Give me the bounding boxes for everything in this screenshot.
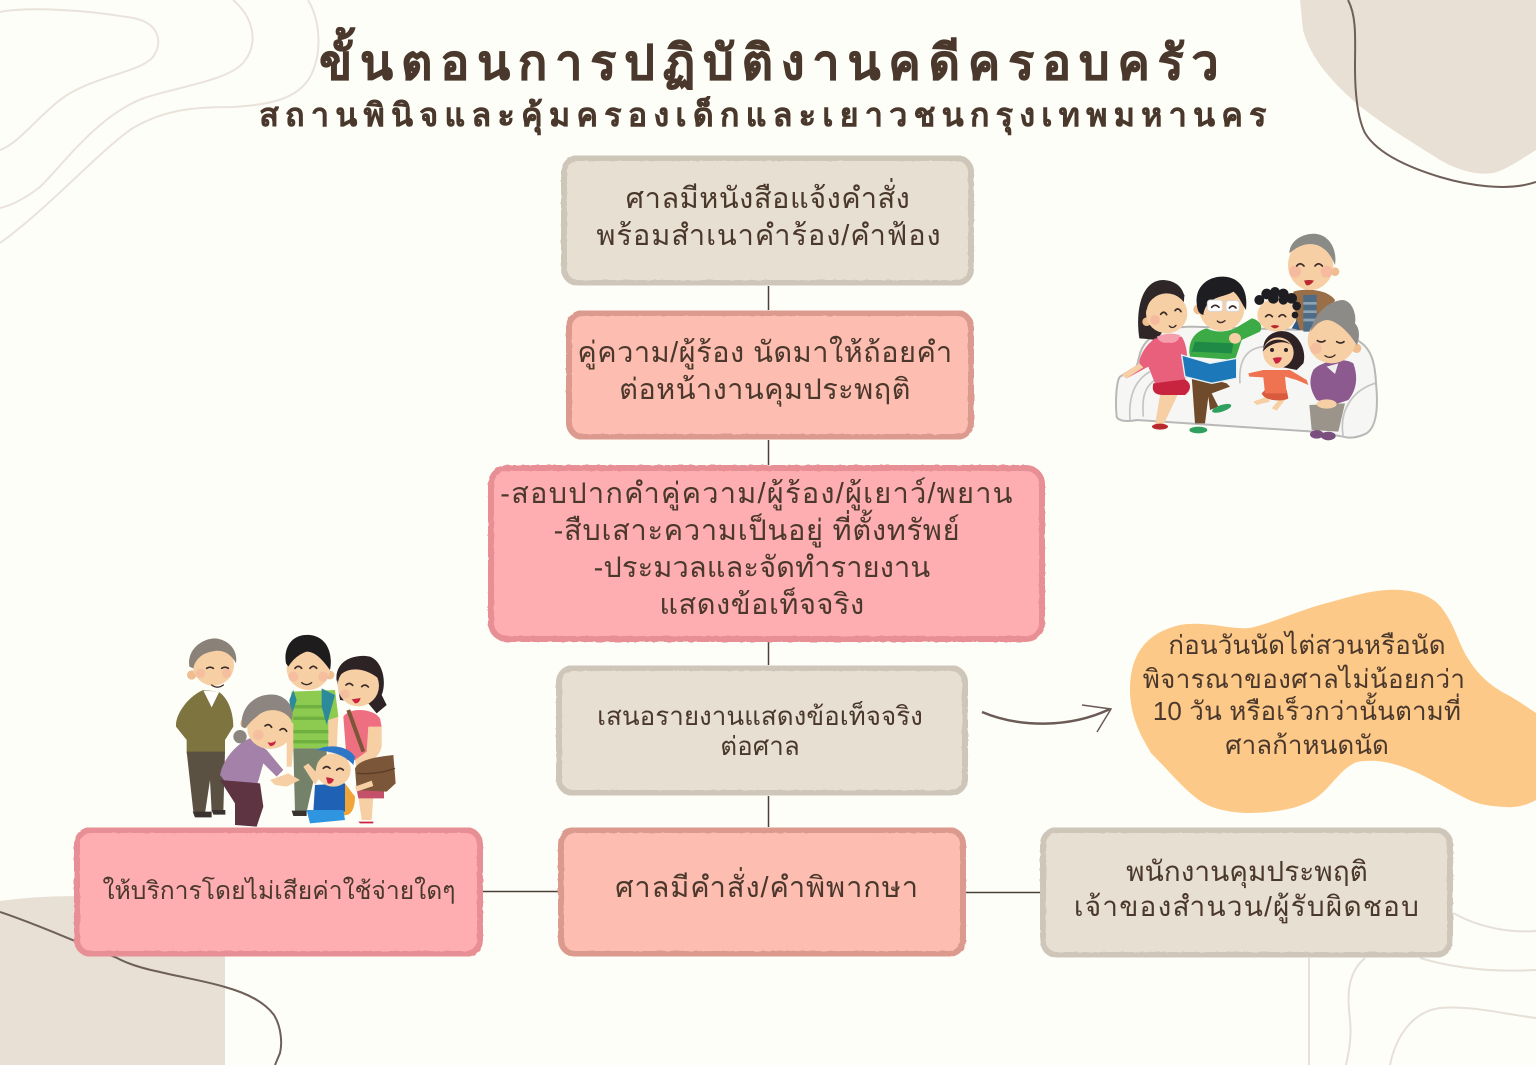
decorative corner: bottom left blob — [0, 896, 281, 1065]
box: court notice: พร้อมสำเนาคำร้อง/คำฟ้อง — [596, 220, 942, 252]
grandmother — [220, 694, 300, 827]
grandmother — [1308, 300, 1361, 440]
box: probation officer: พนักงานคุมประพฤติ — [1126, 856, 1368, 889]
decorative contour lines: bottom right — [1309, 913, 1536, 1065]
box: free of charge — [77, 830, 480, 954]
box: report to court: ต่อศาล — [720, 731, 800, 761]
box: report to court — [559, 668, 965, 793]
box: report to court: เสนอรายงานแสดงข้อเท็จจริง — [597, 700, 923, 731]
box: parties give statement: คู่ความ/ผู้ร้อง นัดมาให้ถ้อยคำ — [577, 335, 953, 370]
title: ขั้นตอนการปฏิบัติงานคดีครอบครัว — [319, 27, 1227, 90]
callout blob: ก่อนวันนัดไต่สวนหรือนัด — [1168, 630, 1446, 660]
box: court notice: ศาลมีหนังสือแจ้งคำสั่ง — [626, 178, 910, 215]
box: investigation — [491, 468, 1042, 639]
arrow — [982, 705, 1111, 732]
woman — [1122, 280, 1190, 430]
man with book — [1182, 277, 1261, 433]
box: parties give statement — [569, 313, 971, 437]
subtitle: สถานพินิจและคุ้มครองเด็กและเยาวชนกรุงเทพมหานคร — [259, 95, 1273, 136]
sofa — [1116, 327, 1377, 438]
box: probation officer: เจ้าของสำนวน/ผู้รับผิดชอบ — [1074, 891, 1420, 924]
box: investigation: -ประมวลและจัดทำรายงาน — [594, 552, 930, 584]
grandfather — [176, 638, 236, 817]
callout blob: 10 วัน หรือเร็วกว่านั้นตามที่ — [1153, 692, 1461, 726]
box: free of charge: ให้บริการโดยไม่เสียค่าใช้จ่ายใดๆ — [102, 877, 456, 905]
box: investigation: -สอบปากคำคู่ความ/ผู้ร้อง/ผู้เยาว์/พยาน — [500, 477, 1014, 511]
box: court notice — [564, 158, 971, 283]
callout blob: ศาลก้าหนดนัด — [1225, 730, 1389, 760]
woman — [336, 656, 396, 823]
decorative contour lines: top left — [0, 0, 318, 243]
callout blob — [1130, 590, 1536, 813]
box: parties give statement: ต่อหน้างานคุมประพฤติ — [619, 374, 911, 407]
decorative corner: top right blob — [1300, 0, 1536, 187]
box: probation officer — [1043, 830, 1450, 955]
callout blob: พิจารณาของศาลไม่น้อยกว่า — [1143, 664, 1465, 694]
box: court order — [561, 830, 963, 954]
box: court order: ศาลมีคำสั่ง/คำพิพากษา — [615, 867, 919, 904]
child — [303, 746, 373, 823]
connector lines — [483, 286, 1040, 892]
box: investigation: -สืบเสาะความเป็นอยู่ ที่ตั้งทรัพย์ — [554, 509, 960, 548]
illustration: family on sofa — [1116, 234, 1377, 440]
curly boy — [1254, 287, 1301, 332]
illustration: family standing — [176, 635, 396, 827]
young man — [285, 635, 338, 816]
title — [259, 27, 1273, 136]
grandfather — [1288, 234, 1339, 332]
girl — [1248, 331, 1308, 411]
box: investigation: แสดงข้อเท็จจริง — [659, 586, 865, 621]
